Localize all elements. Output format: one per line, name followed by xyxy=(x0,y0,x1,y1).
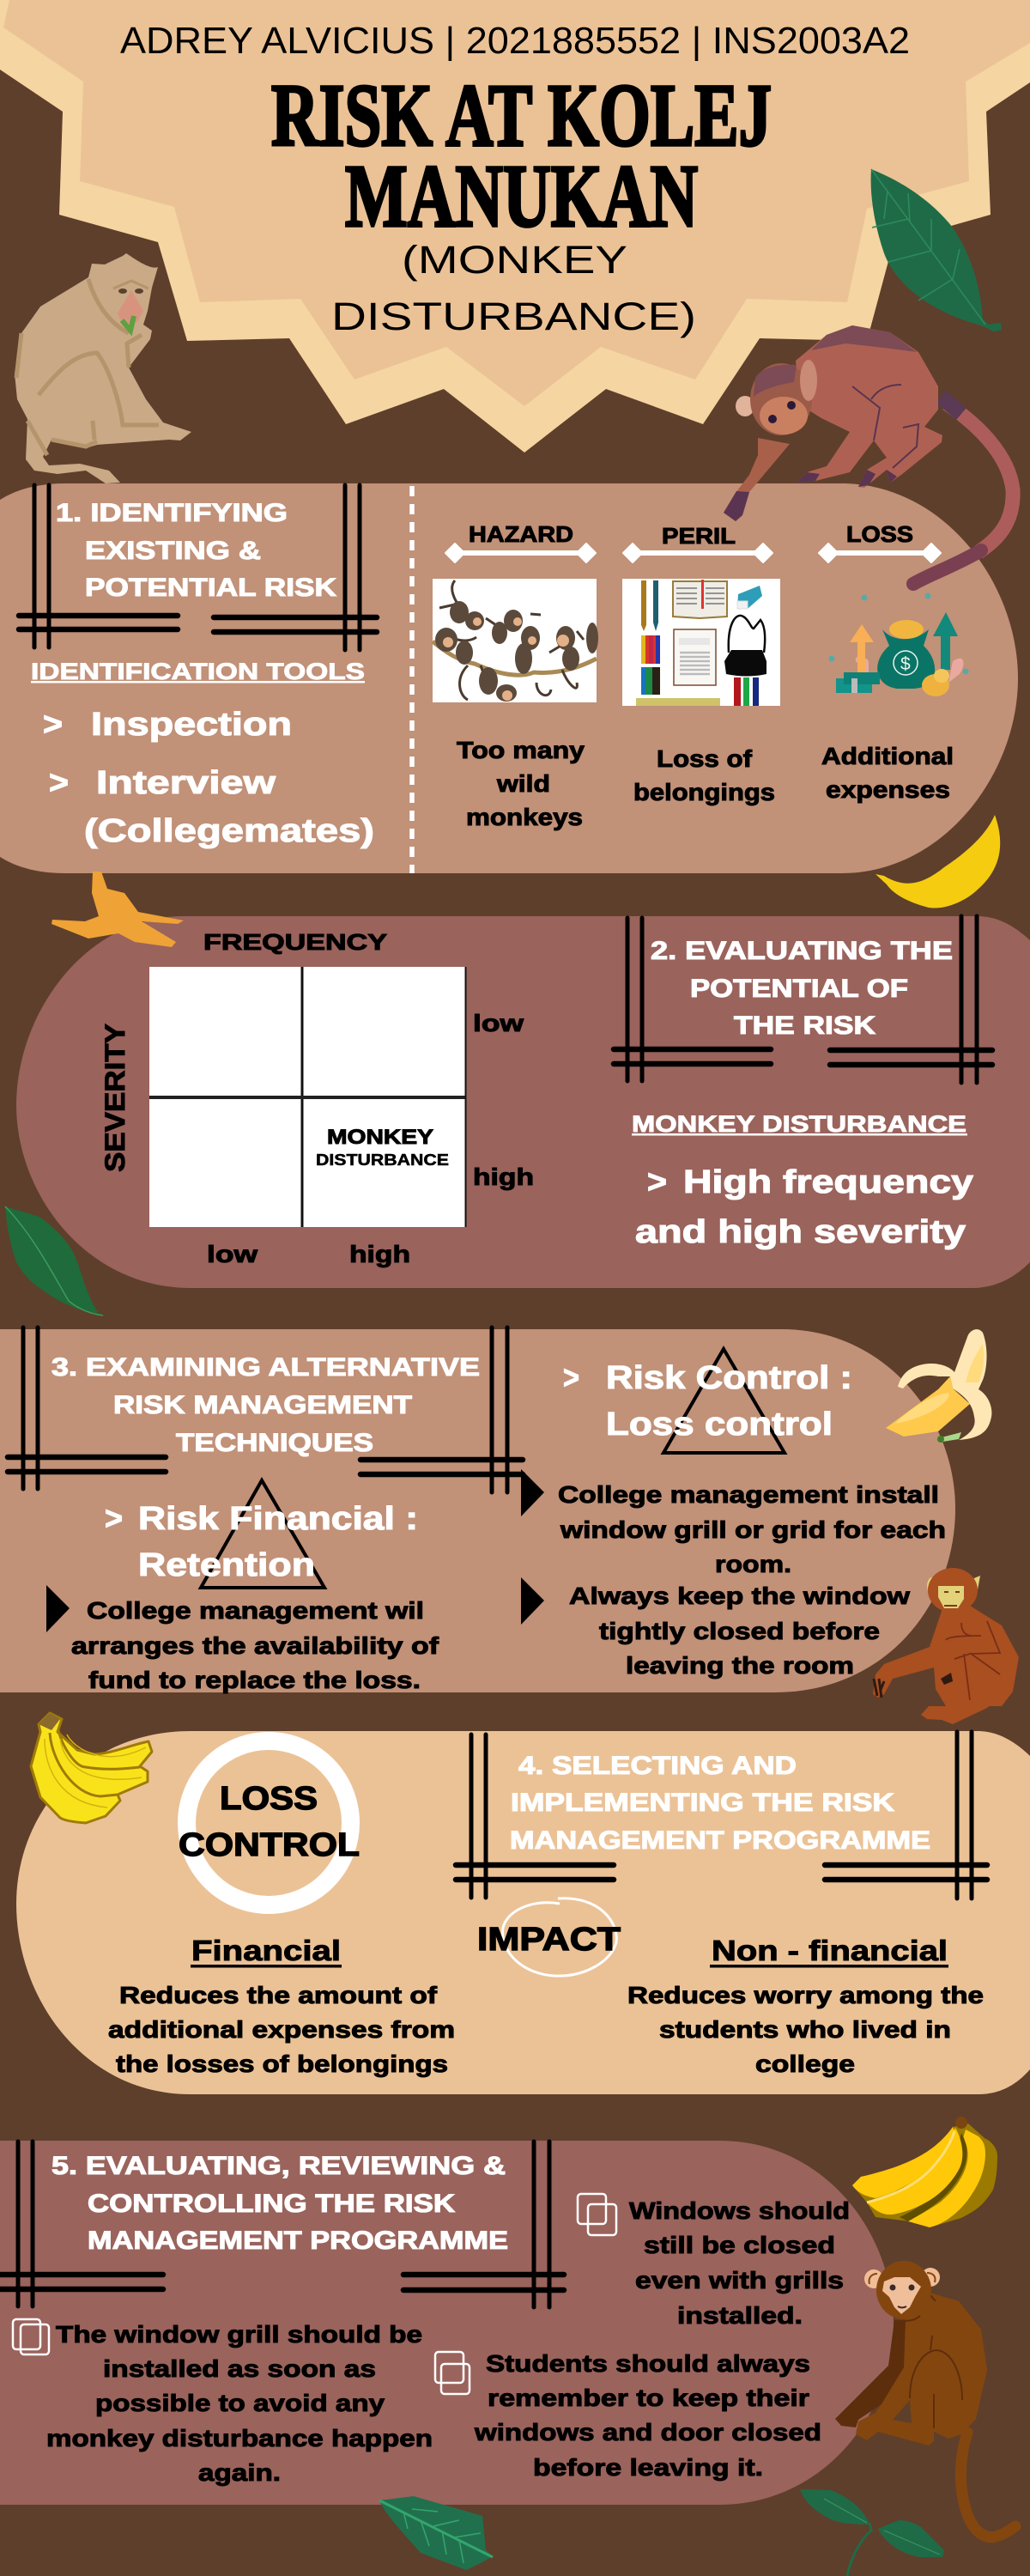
peril label xyxy=(623,523,772,562)
peril caption xyxy=(633,745,775,805)
risk financial label: Retention xyxy=(138,1547,315,1583)
hazard label: HAZARD xyxy=(469,521,573,547)
section 4 heading frame xyxy=(456,1732,987,1899)
non-financial impact: Non - financial xyxy=(712,1935,948,1966)
icon: red monkey xyxy=(724,325,1013,584)
image: belongings xyxy=(622,579,780,706)
loss control actions: Always keep the window xyxy=(569,1583,910,1609)
loss label xyxy=(819,521,941,562)
icon: orange monkey xyxy=(873,1568,1019,1724)
matrix cell label: DISTURBANCE xyxy=(316,1151,449,1169)
section 1 heading: EXISTING & xyxy=(85,537,261,565)
tip: students xyxy=(474,2350,821,2481)
retention action: College management wil xyxy=(87,1597,424,1624)
risk financial label: > xyxy=(105,1501,123,1537)
icon: bullet arrows xyxy=(46,1469,544,1632)
hazard caption xyxy=(457,737,585,830)
icon: leaf top right xyxy=(871,169,1002,331)
retention action: fund to replace the loss. xyxy=(88,1667,421,1693)
financial impact xyxy=(108,1935,455,2077)
tip: windows closed: installed. xyxy=(677,2302,803,2329)
subtitle xyxy=(331,238,696,338)
section 5 heading frame xyxy=(0,2142,564,2307)
icon: yellow bananas xyxy=(852,2117,997,2227)
impact badge xyxy=(477,1899,621,1976)
section 2 conclusion: High frequency xyxy=(683,1164,973,1200)
section 4 heading xyxy=(510,1752,930,1855)
section 2 conclusion: MONKEY DISTURBANCE xyxy=(632,1111,966,1137)
tip: students: remember to keep their xyxy=(488,2385,809,2411)
icon: overlapping squares C xyxy=(435,2352,470,2394)
risk control label: Loss control xyxy=(606,1406,833,1443)
loss caption: Additional xyxy=(821,743,954,769)
non-financial impact: Reduces worry among the xyxy=(627,1982,984,2008)
tip: students: before leaving it. xyxy=(533,2454,763,2481)
peril label: PERIL xyxy=(662,523,736,549)
section 3 heading: TECHNIQUES xyxy=(176,1429,373,1457)
panel: section 4 xyxy=(16,1731,1030,2094)
hazard caption: wild xyxy=(496,770,550,797)
icon: triangle retention xyxy=(201,1480,324,1588)
non-financial impact: students who lived in xyxy=(659,2016,951,2043)
tip: install grill: again. xyxy=(198,2459,281,2486)
panel: section 5 xyxy=(0,2141,894,2505)
impact badge: IMPACT xyxy=(477,1922,621,1958)
section 1 heading: POTENTIAL RISK xyxy=(85,574,336,602)
section 2 heading: 2. EVALUATING THE xyxy=(651,937,953,965)
tip: install grill: The window grill should be xyxy=(56,2321,422,2348)
matrix axis labels: high xyxy=(349,1241,410,1267)
loss label: LOSS xyxy=(846,521,913,547)
section 2 heading: POTENTIAL OF xyxy=(690,975,908,1003)
loss control actions: College management install xyxy=(558,1481,939,1508)
tip: install grill: monkey disturbance happen xyxy=(46,2425,433,2451)
hazard label xyxy=(445,521,596,562)
identification tools: > xyxy=(43,707,63,743)
tip: install grill: installed as soon as xyxy=(103,2355,376,2382)
hazard caption: monkeys xyxy=(466,804,583,830)
icon: money bag xyxy=(829,592,968,696)
risk control label: Risk Control : xyxy=(606,1360,852,1396)
matrix axis labels: SEVERITY xyxy=(100,1024,130,1172)
loss control actions: window grill or grid for each xyxy=(560,1516,946,1543)
loss control text xyxy=(179,1781,360,1863)
peril caption: Loss of xyxy=(657,745,753,772)
matrix axis labels: low xyxy=(207,1241,258,1267)
title: RISK AT KOLEJ xyxy=(271,66,772,165)
icon: banana bunch xyxy=(31,1713,152,1823)
loss control actions: leaving the room xyxy=(626,1652,854,1679)
matrix cell label: MONKEY xyxy=(327,1126,433,1149)
section 3 heading frame xyxy=(8,1327,523,1492)
author line: ADREY ALVICIUS | 2021885552 | INS2003A2 xyxy=(120,20,910,62)
loss control text: LOSS xyxy=(220,1781,318,1817)
financial impact: Financial xyxy=(191,1935,341,1966)
section 5 heading: MANAGEMENT PROGRAMME xyxy=(88,2227,508,2255)
section 2 conclusion: > xyxy=(647,1164,667,1200)
dashed divider xyxy=(409,486,415,873)
retention action xyxy=(71,1597,439,1693)
matrix axis labels xyxy=(100,929,534,1267)
panel: section 1 xyxy=(0,483,1018,873)
section 5 heading: CONTROLLING THE RISK xyxy=(88,2190,455,2218)
financial impact: the losses of belongings xyxy=(116,2050,448,2077)
hazard caption: Too many xyxy=(457,737,585,763)
tip: install grill: possible to avoid any xyxy=(95,2390,385,2416)
risk financial label: Risk Financial : xyxy=(138,1501,418,1537)
section 2 conclusion xyxy=(632,1111,973,1250)
identification tools xyxy=(31,659,374,849)
matrix axis labels: low xyxy=(473,1010,524,1036)
loss caption xyxy=(821,743,954,803)
section 3 heading: RISK MANAGEMENT xyxy=(113,1391,412,1419)
loss caption: expenses xyxy=(826,776,950,803)
panel: section 2 xyxy=(16,916,1030,1288)
tip: students: Students should always xyxy=(486,2350,810,2377)
tip: install grill xyxy=(46,2321,433,2486)
risk control label: > xyxy=(563,1360,579,1396)
financial impact: additional expenses from xyxy=(108,2016,455,2043)
icon: money bag: $ xyxy=(900,654,911,674)
identification tools: (Collegemates) xyxy=(84,813,374,849)
loss control actions xyxy=(558,1481,946,1679)
section 1 heading frame xyxy=(19,485,377,650)
tip: windows closed xyxy=(629,2197,850,2329)
icon: tan monkey xyxy=(15,253,191,483)
icon: center leaf xyxy=(379,2496,493,2570)
icon: brown monkey xyxy=(835,2261,1015,2537)
icon: banana peel xyxy=(52,872,184,947)
title: MANUKAN xyxy=(345,147,698,246)
risk financial label xyxy=(105,1501,418,1583)
panel: section 3 xyxy=(0,1329,955,1692)
non-financial impact xyxy=(627,1935,984,2077)
subtitle: DISTURBANCE) xyxy=(331,295,696,338)
loss control actions: tightly closed before xyxy=(599,1618,880,1644)
tip: windows closed: still be closed xyxy=(644,2232,835,2258)
tip: windows closed: even with grills xyxy=(635,2267,844,2293)
section 5 heading: 5. EVALUATING, REVIEWING & xyxy=(52,2152,506,2180)
section 5 heading xyxy=(52,2152,508,2255)
matrix axis labels: FREQUENCY xyxy=(203,929,387,955)
image: monkeys on a vine xyxy=(433,579,598,702)
tip: students: windows and door closed xyxy=(474,2419,821,2445)
icon: overlapping squares B xyxy=(13,2319,49,2354)
icon: triangle loss control xyxy=(663,1349,785,1453)
section 1 heading xyxy=(56,499,336,602)
loss control actions: room. xyxy=(715,1551,791,1577)
section 3 heading: 3. EXAMINING ALTERNATIVE xyxy=(52,1353,480,1382)
icon: overlapping squares A xyxy=(578,2194,616,2235)
icon: plant xyxy=(800,2489,944,2576)
icon: leaf lower left xyxy=(5,1206,119,1317)
loss control text: CONTROL xyxy=(179,1827,360,1863)
retention action: arranges the availability of xyxy=(71,1632,439,1659)
section 2 heading: THE RISK xyxy=(734,1012,876,1040)
title xyxy=(271,66,772,246)
section 4 heading: 4. SELECTING AND xyxy=(518,1752,797,1780)
non-financial impact: college xyxy=(755,2050,855,2077)
icon: peeled banana xyxy=(886,1329,991,1443)
header starburst xyxy=(0,0,1030,453)
matrix cell label xyxy=(316,1126,449,1169)
subtitle: (MONKEY xyxy=(402,238,627,282)
identification tools: Inspection xyxy=(91,707,292,743)
section 1 heading: 1. IDENTIFYING xyxy=(56,499,288,527)
matrix axis labels: high xyxy=(473,1163,534,1190)
section 4 heading: MANAGEMENT PROGRAMME xyxy=(510,1826,930,1855)
identification tools: > xyxy=(49,765,69,801)
tip: windows closed: Windows should xyxy=(629,2197,850,2224)
financial impact: Reduces the amount of xyxy=(119,1982,438,2008)
icon: yellow banana xyxy=(876,815,1000,908)
identification tools: Interview xyxy=(96,765,276,801)
section 4 heading: IMPLEMENTING THE RISK xyxy=(511,1789,894,1817)
section 2 conclusion: and high severity xyxy=(635,1214,966,1250)
loss control ring xyxy=(179,1741,360,1905)
section 3 heading xyxy=(52,1353,480,1457)
peril caption: belongings xyxy=(633,779,775,805)
section 2 heading frame xyxy=(614,916,992,1083)
identification tools: IDENTIFICATION TOOLS xyxy=(31,659,365,684)
risk matrix xyxy=(149,967,467,1227)
risk control label xyxy=(563,1360,852,1443)
section 2 heading xyxy=(651,937,953,1040)
